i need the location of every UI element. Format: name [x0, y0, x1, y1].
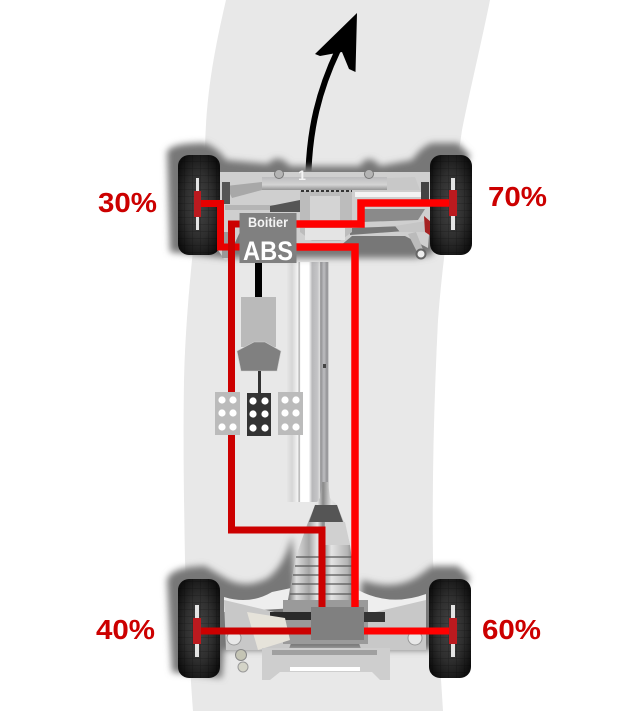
brake caliper: front right: [449, 190, 457, 216]
pedal: right: [278, 392, 303, 435]
pedal: brake: [247, 393, 271, 436]
small label 1: 1: [298, 167, 306, 183]
rear right wheel: [429, 579, 471, 678]
rear axle assembly: [224, 600, 426, 680]
rear distribution box: [311, 607, 364, 640]
pedal: left: [215, 392, 240, 435]
direction arrow: [308, 13, 357, 171]
ABS unit: ABS: [243, 236, 293, 266]
front axle shadow: [167, 143, 470, 258]
ABS unit: Boitier: [248, 215, 289, 230]
rear left wheel: [178, 579, 220, 678]
central drive shaft: [287, 262, 329, 502]
brake line: front left: [200, 204, 242, 247]
brake line: rear axle left: [200, 628, 312, 634]
rear axle shadow: [167, 535, 470, 678]
brake caliper: rear right: [449, 618, 457, 644]
brake caliper: front left: [194, 191, 201, 217]
front right wheel: [430, 155, 472, 255]
label: rear left 40%: 40%: [96, 614, 155, 645]
road: [184, 0, 490, 711]
transmission: [224, 482, 426, 612]
brake servo: [237, 342, 281, 371]
black rod from ABS to master cylinder: [255, 262, 262, 298]
front axle assembly: [218, 170, 432, 262]
brake line: rear axle right: [363, 628, 450, 634]
front left wheel: [178, 155, 220, 255]
ABS unit: [240, 213, 296, 266]
brake caliper: rear left: [193, 618, 201, 644]
brake line: rear right: [295, 247, 355, 609]
label: front right 70%: 70%: [488, 181, 547, 212]
pedal rod: [258, 371, 261, 395]
label: front left 30%: 30%: [98, 187, 157, 218]
brake line: rear left: [232, 224, 322, 609]
brake line: front right: [295, 203, 450, 224]
label: rear right 60%: 60%: [482, 614, 541, 645]
master cylinder: [241, 297, 276, 347]
